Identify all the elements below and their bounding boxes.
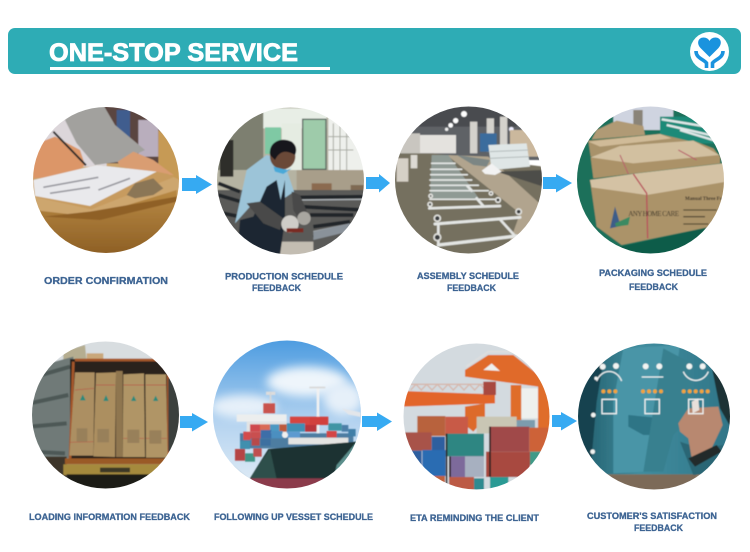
label: FOLLOWING UP VESSET SCHEDULE: [214, 512, 374, 523]
label: ETA REMINDING THE CLIENT: [410, 513, 539, 524]
photo: packed cartons: [577, 106, 724, 254]
label: LOADING INFORMATION FEEDBACK: [29, 512, 190, 523]
label: [417, 271, 520, 294]
step 2: production schedule feedback: [217, 108, 364, 292]
photo: port cranes and containers: [400, 342, 553, 495]
step 7: ETA reminding the client: [400, 342, 553, 524]
step 5: loading information feedback: [29, 335, 190, 523]
label: ASSEMBLY SCHEDULE: [417, 271, 520, 282]
title: ONE-STOP SERVICE: [49, 39, 298, 67]
photo: loaded container: [32, 342, 179, 488]
arrow 6: [552, 412, 577, 430]
label: [599, 268, 708, 293]
step 4: packaging schedule feedback: [577, 106, 724, 290]
label: FEEDBACK: [634, 523, 683, 534]
arrow 1: [182, 175, 212, 194]
label: ORDER CONFIRMATION: [44, 275, 168, 287]
label: [225, 272, 344, 294]
arrow 2: [366, 174, 390, 192]
label: PACKAGING SCHEDULE: [599, 268, 708, 279]
title underline: [50, 67, 330, 70]
label: [587, 511, 717, 534]
photo: packed cartons: Manual Three Function: [685, 197, 736, 202]
icon: heart held by hands: [690, 32, 729, 71]
photo: satisfaction rating on shirt: [578, 344, 730, 490]
label: FEEDBACK: [629, 282, 678, 293]
photo: container ship: [213, 340, 361, 488]
arrow 4: [180, 413, 208, 432]
photo: signing clipboard: [33, 107, 179, 253]
label: FEEDBACK: [252, 283, 301, 294]
photo: factory worker: [217, 108, 364, 254]
step 1: order confirmation: [33, 107, 179, 284]
step 8: customer's satisfaction feedback: [575, 342, 735, 534]
label: FEEDBACK: [447, 283, 496, 294]
step 3: assembly schedule feedback: [393, 100, 547, 294]
step 6: following up vessel schedule: [210, 338, 374, 523]
arrow 5: [362, 412, 392, 431]
header banner: [8, 28, 741, 74]
photo: assembly line of frames: [395, 106, 542, 254]
photo: packed cartons: ANY HOME CARE: [628, 210, 679, 218]
label: CUSTOMER'S SATISFACTION: [587, 511, 717, 522]
arrow 3: [543, 174, 572, 192]
label: PRODUCTION SCHEDULE: [225, 272, 344, 282]
